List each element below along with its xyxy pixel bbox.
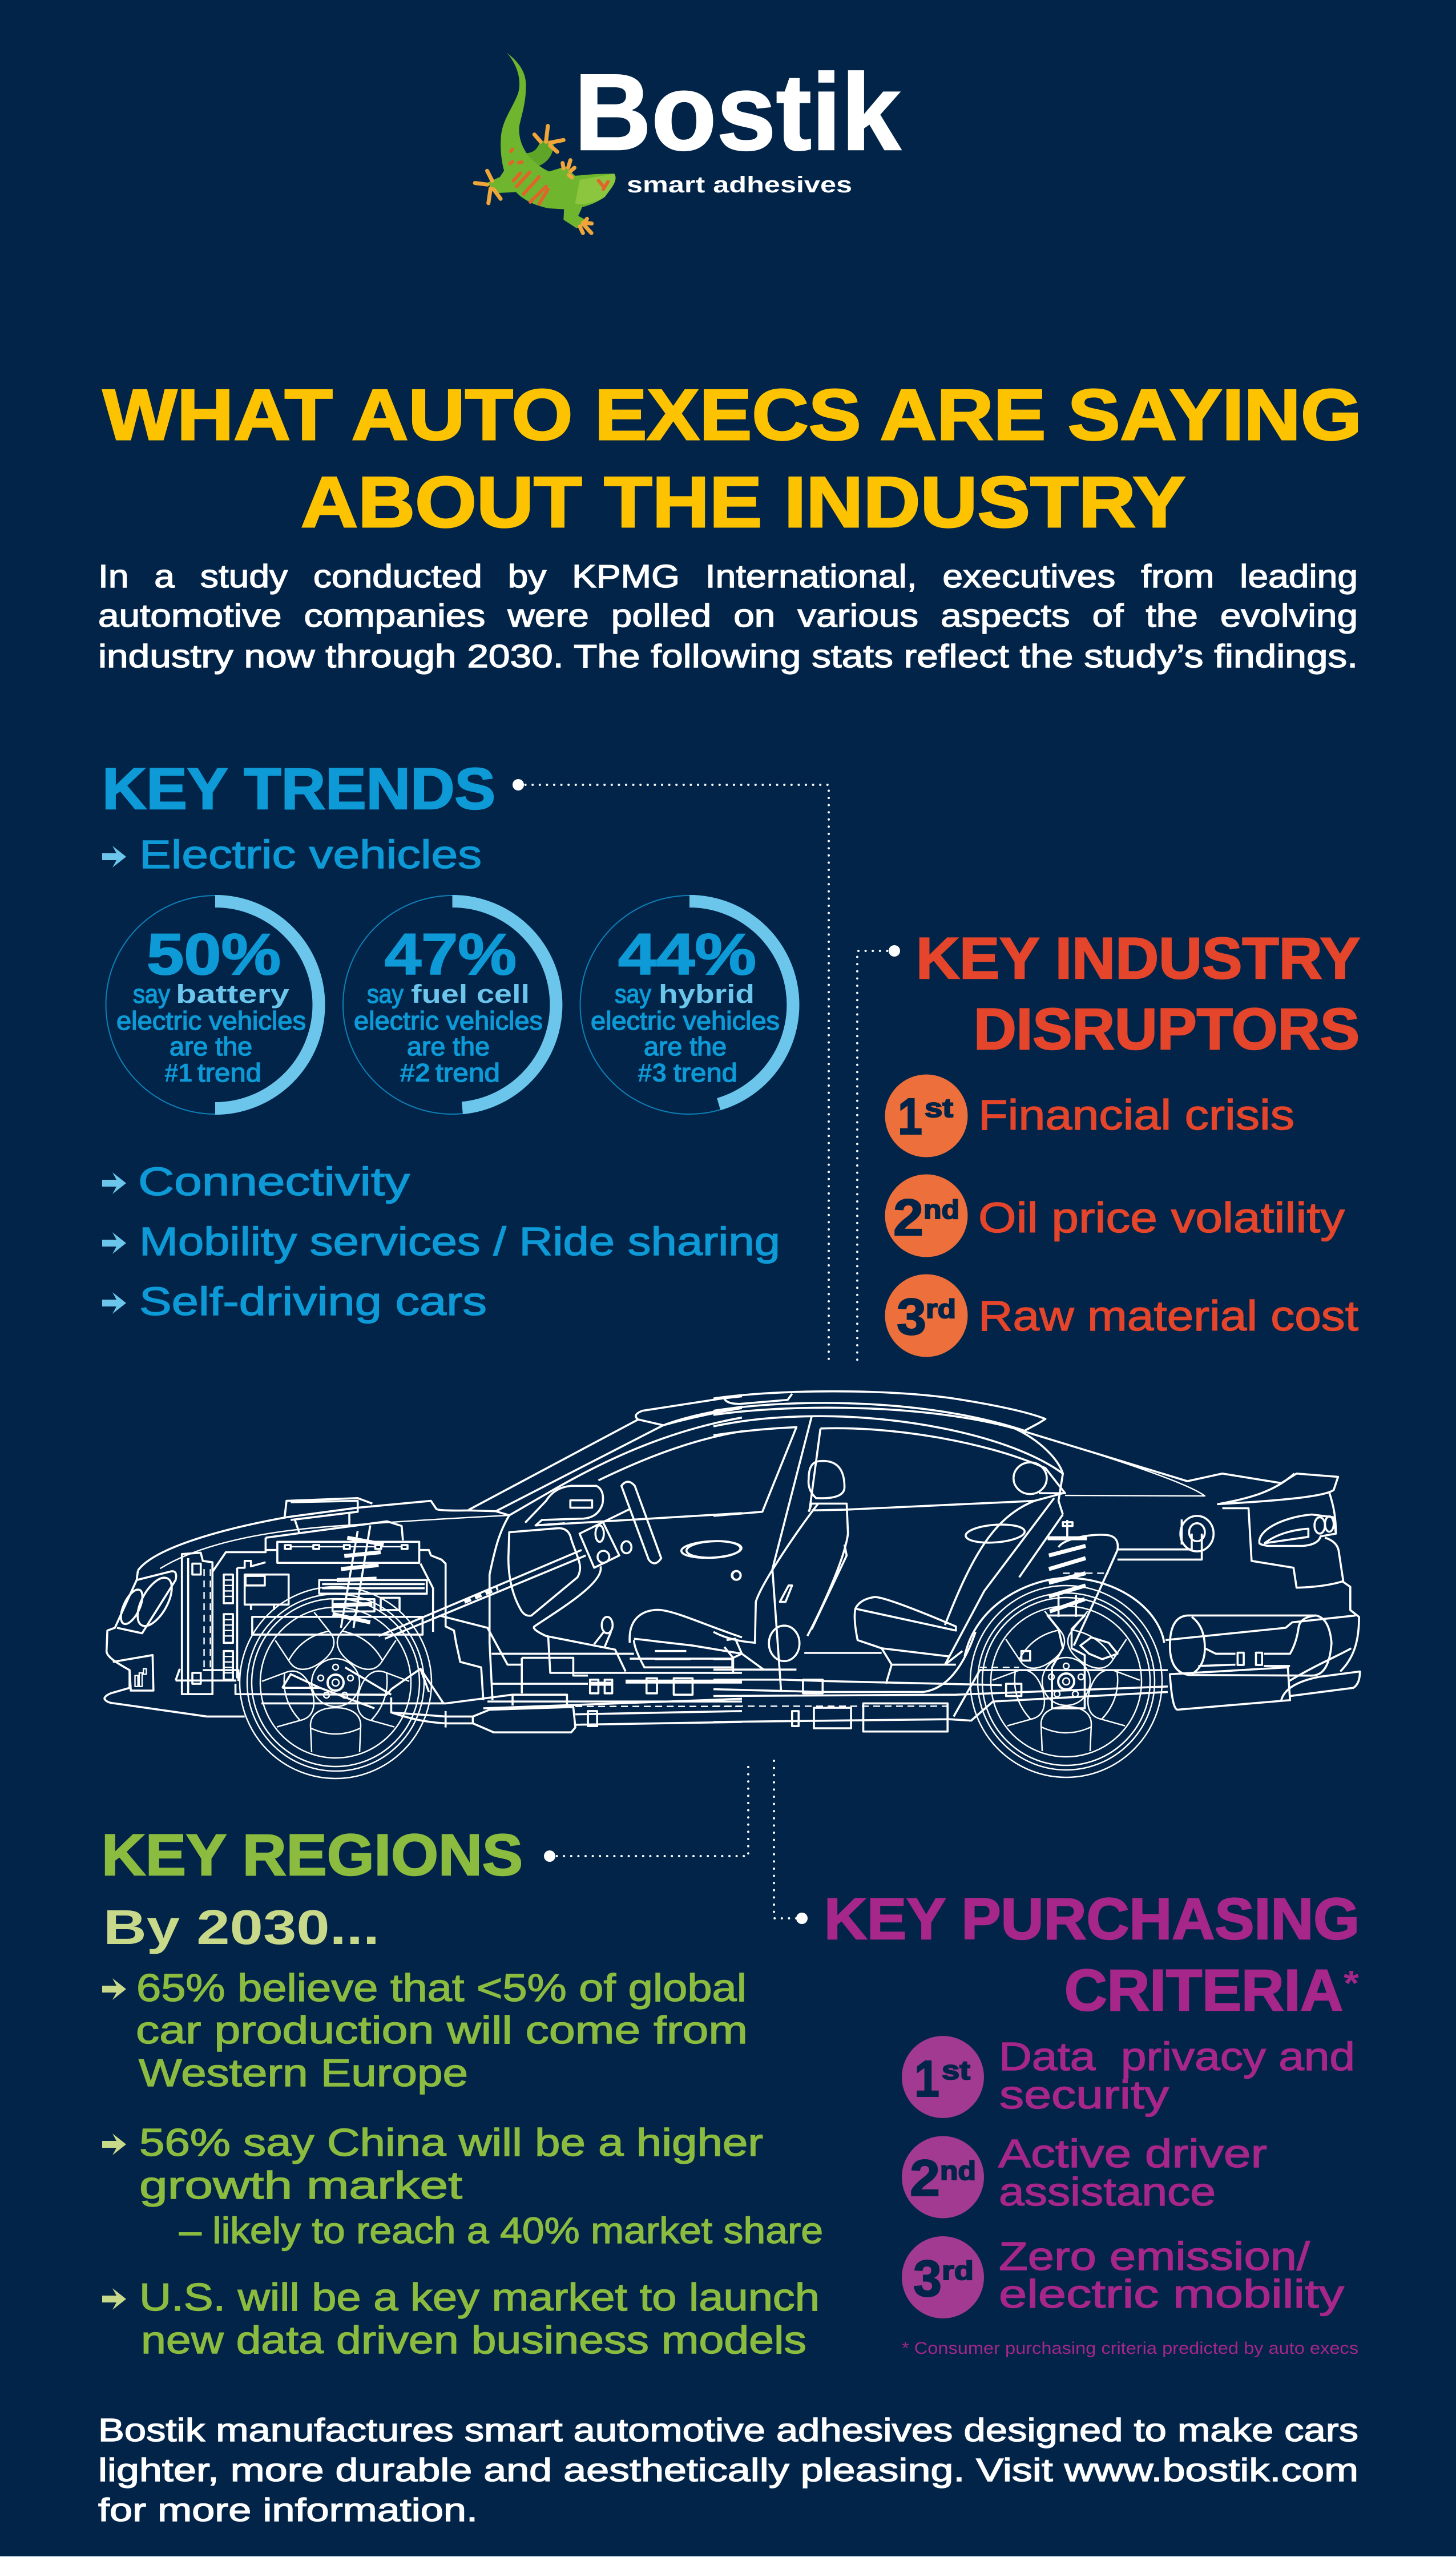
item: data privacy: [999, 2034, 1355, 2117]
chart: 47% fuel cell: say: [367, 979, 404, 1009]
stat: western europe: car production will come from: [136, 2009, 748, 2052]
trend: electric vehicles: Electric vehicles: [139, 832, 482, 877]
title: [103, 374, 1362, 542]
rank badge: 1st: st: [942, 2055, 970, 2085]
chart: 44% hybrid: #3: [638, 1058, 667, 1087]
stat: china: – likely to reach a 40% market share: [179, 2210, 823, 2251]
panel: key trends: [102, 756, 799, 1324]
rank badge: 1st: [902, 2036, 984, 2118]
stat: western europe: Western Europe: [139, 2051, 468, 2095]
rank badge: 2nd: 2: [910, 2150, 940, 2207]
stat: western europe: [136, 1966, 748, 2095]
heading: key industry disruptors: DISRUPTORS: [974, 997, 1360, 1062]
connector: key industry disruptors: [857, 945, 900, 1363]
chart: 44% hybrid: electric vehicles: [591, 1006, 780, 1035]
chart: 50% battery: electric vehicles: [116, 1006, 306, 1035]
rank badge: 3rd: [902, 2236, 984, 2318]
stat: U.S.: [139, 2276, 820, 2362]
rank badge: 1st: [885, 1074, 968, 1157]
chart: 44% hybrid: trend: [673, 1058, 737, 1087]
rank badge: 2nd: nd: [940, 2156, 976, 2185]
icon: gecko: [475, 53, 616, 233]
heading: key industry disruptors: [916, 926, 1360, 1062]
item: active driver assistance: Active driver: [998, 2131, 1267, 2176]
arrow: china stat: [102, 2133, 126, 2155]
stat: china: 56% say China will be a higher: [139, 2121, 763, 2164]
item: zero emission: Zero emission/: [999, 2234, 1310, 2278]
stat: china: growth market: [139, 2164, 462, 2207]
car cutaway illustration: [104, 1392, 1360, 1778]
rank badge: 3rd: rd: [926, 1294, 956, 1324]
rank badge: 3rd: 3: [913, 2251, 942, 2308]
chart: 50% battery: battery: [176, 979, 289, 1009]
heading: key purchasing criteria: KEY PURCHASING: [824, 1886, 1360, 1951]
item: zero emission: [999, 2234, 1344, 2316]
logo: Bostik smart adhesives: [475, 52, 901, 233]
panel: key industry disruptors: [885, 926, 1360, 1357]
rank badge: 2nd: [885, 1175, 968, 1257]
rank badge: 2nd: 2: [893, 1189, 923, 1247]
title: ABOUT THE INDUSTRY: [301, 462, 1185, 542]
stat: china: [139, 2121, 823, 2251]
arrow: western europe stat: [102, 1978, 126, 2000]
intro paragraph: automotive companies were polled on various aspects of the evolving: [98, 598, 1358, 634]
heading: key trends: KEY TRENDS: [102, 756, 495, 821]
intro paragraph: [98, 558, 1358, 675]
chart: 50% battery: are the: [170, 1032, 252, 1061]
closing paragraph: Bostik manufactures smart automotive adhesives designed to make cars: [98, 2412, 1358, 2449]
trend: self-driving cars: Self-driving cars: [139, 1279, 487, 1324]
front wheel: [240, 1587, 431, 1778]
chart: 47% fuel cell: fuel cell: [411, 979, 530, 1009]
stat: U.S.: new data driven business models: [141, 2318, 806, 2362]
connector: key purchasing criteria: [774, 1761, 808, 1924]
chart: 47% fuel cell: trend: [435, 1058, 500, 1087]
chart: 44% hybrid: are the: [644, 1032, 727, 1061]
chart: 44% hybrid: 44%: [618, 922, 756, 987]
heading: key industry disruptors: KEY INDUSTRY: [916, 926, 1360, 991]
chart: 44% hybrid: hybrid: [659, 979, 755, 1009]
item: data privacy: security: [999, 2072, 1169, 2117]
chart: 50% battery: [106, 896, 324, 1114]
heading: key purchasing criteria: [824, 1886, 1360, 2023]
rank badge: 3rd: rd: [942, 2256, 974, 2285]
connector: key trends: [513, 779, 829, 1363]
item: active driver assistance: [998, 2131, 1267, 2214]
rank badge: 2nd: [902, 2136, 984, 2218]
closing paragraph: [98, 2412, 1358, 2528]
arrow: connectivity: [102, 1172, 126, 1194]
rear half of car: [685, 1392, 1360, 1732]
closing paragraph: for more information.: [98, 2492, 478, 2528]
chart: 47% fuel cell: electric vehicles: [354, 1006, 543, 1035]
chart: 50% battery: 50%: [147, 922, 281, 987]
closing paragraph: lighter, more durable and aesthetically pleasing. Visit www.bostik.com: [98, 2452, 1358, 2489]
connector: key regions: [544, 1761, 748, 1862]
panel: key purchasing criteria: [824, 1886, 1360, 2358]
rank badge: 2nd: nd: [923, 1195, 959, 1224]
heading: key purchasing criteria: *: [1344, 1964, 1360, 2003]
item: financial crisis: Financial crisis: [978, 1091, 1294, 1139]
arrow: electric vehicles: [102, 846, 126, 868]
footnote: * Consumer purchasing criteria predicted by auto execs: [902, 2339, 1358, 2358]
chart: 47% fuel cell: 47%: [385, 922, 517, 987]
wordmark: Bostik: [574, 52, 901, 173]
item: zero emission: electric mobility: [999, 2272, 1344, 2316]
rear wheel: [970, 1586, 1162, 1777]
arrow: mobility services: [102, 1232, 126, 1254]
stat: western europe: 65% believe that <5% of global: [136, 1966, 747, 2010]
trend: mobility services: Mobility services / Ride sharing: [139, 1219, 780, 1264]
chart: 44% hybrid: say: [615, 979, 651, 1009]
subheading: by 2030: By 2030...: [103, 1901, 380, 1955]
chart: 47% fuel cell: [343, 896, 562, 1114]
intro paragraph: industry now through 2030. The following stats reflect the study’s findings.: [98, 638, 1358, 675]
item: raw material cost: Raw material cost: [978, 1292, 1358, 1340]
heading: key purchasing criteria: CRITERIA: [1064, 1958, 1343, 2023]
heading: key regions: KEY REGIONS: [102, 1822, 523, 1887]
front half of car: [104, 1396, 743, 1732]
rank badge: 1st: st: [925, 1093, 953, 1123]
stat: U.S.: U.S. will be a key market to launch: [139, 2276, 820, 2319]
item: data privacy: Data privacy and: [999, 2034, 1355, 2079]
chart: 50% battery: trend: [197, 1058, 261, 1087]
item: oil price volatility: Oil price volatility: [978, 1194, 1345, 1241]
tagline: smart adhesives: [627, 172, 852, 197]
arrow: U.S. stat: [102, 2288, 126, 2310]
rank badge: 3rd: 3: [897, 1289, 926, 1346]
rank badge: 1st: 1: [914, 2051, 939, 2108]
rank badge: 1st: 1: [898, 1088, 922, 1146]
arrow: self-driving cars: [102, 1292, 126, 1314]
rank badge: 3rd: [885, 1274, 968, 1357]
chart: 50% battery: say: [133, 979, 170, 1009]
chart: 44% hybrid: [580, 896, 799, 1114]
item: active driver assistance: assistance: [999, 2169, 1216, 2214]
chart: 47% fuel cell: #2: [400, 1058, 430, 1087]
title: WHAT AUTO EXECS ARE SAYING: [103, 374, 1362, 455]
panel: key regions: [102, 1822, 823, 2362]
trend: connectivity: Connectivity: [138, 1159, 410, 1204]
chart: 47% fuel cell: are the: [407, 1032, 490, 1061]
intro paragraph: In a study conducted by KPMG International, executives from leading: [98, 558, 1358, 595]
chart: 50% battery: #1: [164, 1058, 192, 1087]
